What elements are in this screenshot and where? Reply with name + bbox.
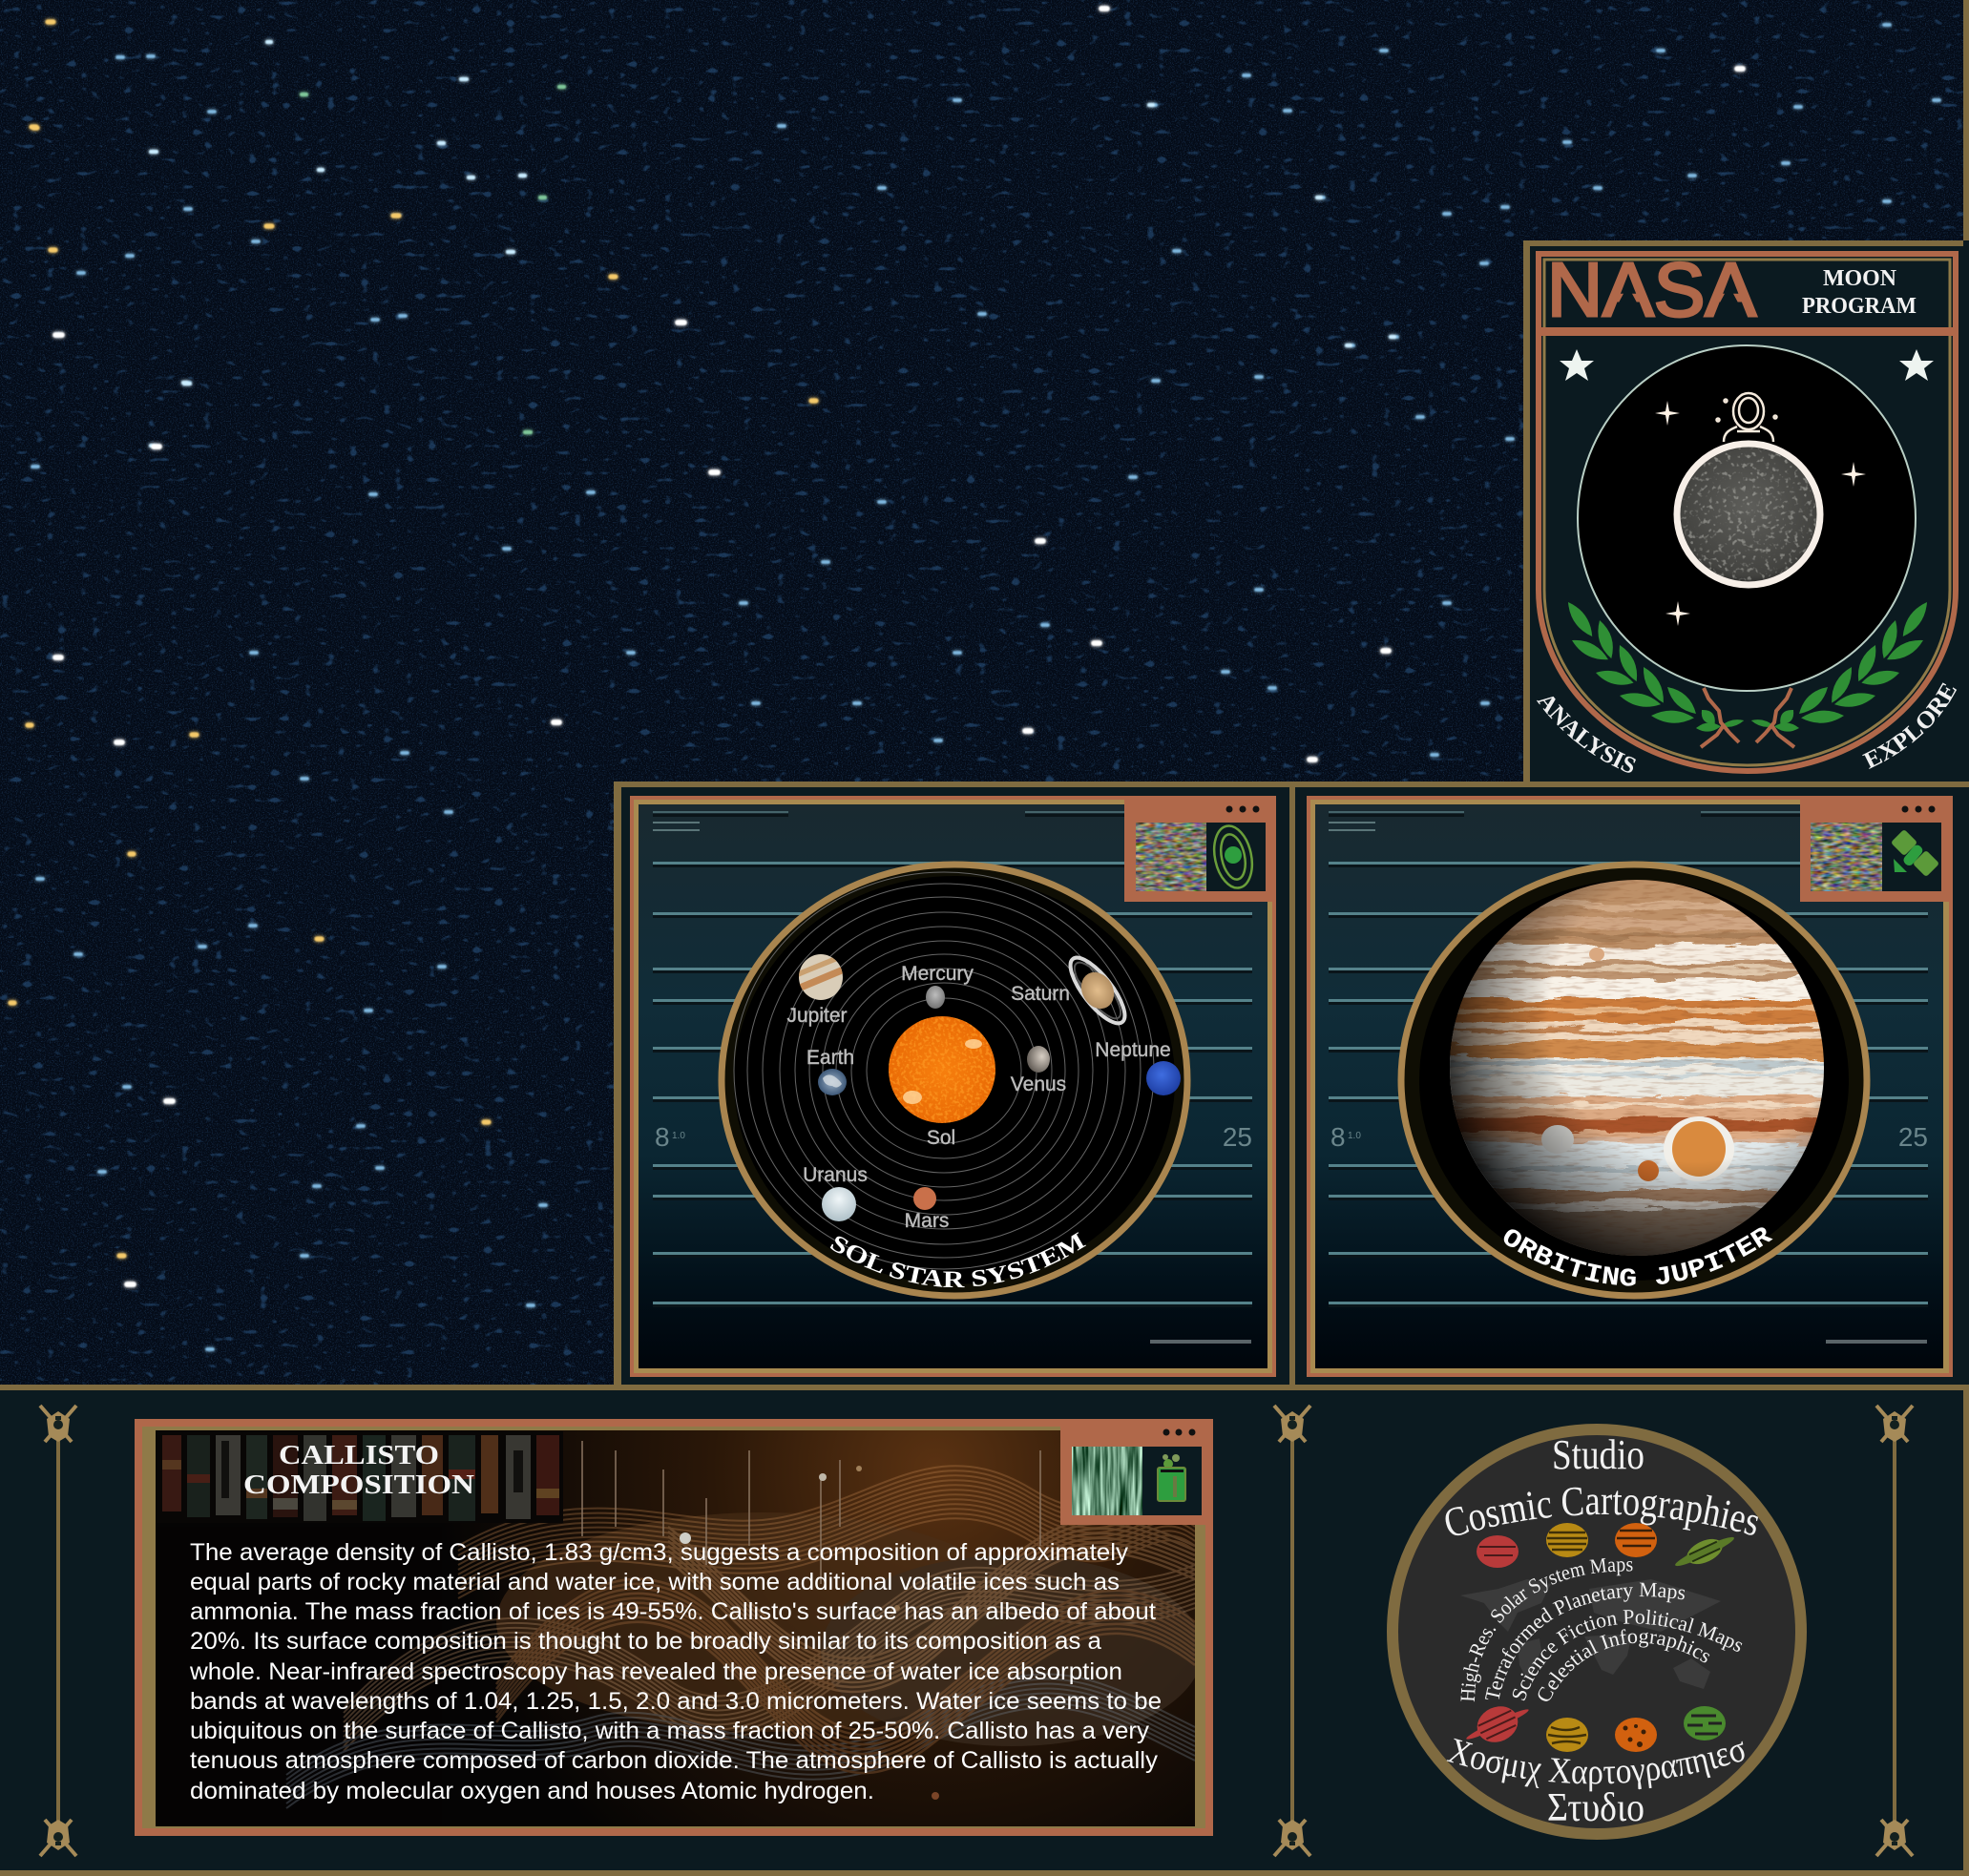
- bookshelf title backdrop: [155, 1431, 563, 1523]
- curved label explore: EXPLORE: [1862, 682, 1957, 769]
- scale labels: 25: [1223, 1122, 1252, 1152]
- planet labels: Uranus: [803, 1164, 868, 1186]
- planet labels: [786, 963, 1171, 1232]
- Callisto moon: [1677, 444, 1820, 585]
- scale labels: 8: [1330, 1122, 1346, 1152]
- planet: jupiter: [798, 954, 844, 1000]
- composition body text: 20%. Its surface composition is thought to be broadly similar to its composition as a: [190, 1628, 1101, 1655]
- decorative scan lines: [653, 811, 1252, 1344]
- planet labels: Sol: [927, 1127, 955, 1149]
- cosmic cartographies curved heading: Cosmic Cartographies: [1445, 1487, 1758, 1536]
- panel: cosmic cartographies studio logo: [1393, 1429, 1801, 1834]
- noise thumbnail: [1136, 823, 1206, 891]
- moon program label: [1802, 266, 1917, 319]
- scale labels: [655, 1122, 1252, 1152]
- planet: saturn: [1061, 950, 1134, 1031]
- great red spot: [1664, 1116, 1734, 1181]
- greek curved heading: Χοσμιχ Χαρτογραπηιεσ: [1444, 1729, 1750, 1792]
- composition body text: The average density of Callisto, 1.83 g/cm3, suggests a composition of approximately: [190, 1539, 1129, 1566]
- green noise thumbnail: [1072, 1447, 1142, 1515]
- curved label analysis: ANALYSIS: [1537, 697, 1636, 773]
- world map silhouette: [1460, 1579, 1721, 1689]
- panel heading: CALLISTO: [279, 1441, 439, 1470]
- icon: orbit: [1209, 823, 1257, 891]
- scale labels: [1330, 1122, 1928, 1152]
- curved services list: Science Fiction Political Maps: [1506, 1604, 1748, 1704]
- curved services list: Terraformed Planetary Maps: [1485, 1582, 1685, 1700]
- planet labels: Saturn: [1011, 983, 1070, 1005]
- studio heading: Studio: [1552, 1431, 1644, 1478]
- white stars: [1560, 349, 1934, 381]
- noise thumbnail: [1811, 823, 1882, 891]
- badge header divider: [1539, 327, 1956, 336]
- tab with orbit icon: [1124, 796, 1276, 902]
- planet: jupiter: [1450, 880, 1824, 1256]
- curved title: sol star system: SOL STAR SYSTEM: [830, 1232, 1086, 1288]
- composition body text: equal parts of rocky material and water ice, with some additional volatile ices such as: [190, 1569, 1120, 1595]
- panel frame background: [614, 782, 1969, 1392]
- decorative scan lines: [1329, 811, 1928, 1344]
- planet: mars: [913, 1187, 936, 1210]
- planet: venus: [1027, 1046, 1050, 1073]
- planet: mercury: [926, 986, 945, 1009]
- panel body: [1309, 798, 1951, 1375]
- moon program label: MOON: [1823, 266, 1897, 291]
- planet labels: Mercury: [901, 963, 974, 985]
- composition body text: dominated by molecular oxygen and houses Atomic hydrogen.: [190, 1778, 874, 1804]
- icon: beaker: [1158, 1454, 1185, 1501]
- panel: orbiting jupiter: [1307, 796, 1953, 1377]
- planet labels: Venus: [1011, 1073, 1066, 1095]
- laurel wreath right: [1750, 598, 1932, 747]
- ornament column middle: [1274, 1406, 1310, 1856]
- panel body: [632, 798, 1274, 1375]
- scale labels: 25: [1898, 1122, 1928, 1152]
- laurel wreath left: [1563, 598, 1745, 747]
- planet labels: Neptune: [1095, 1039, 1171, 1061]
- right gold edge strip: [1963, 0, 1969, 1876]
- badge shield inner gold line: [1544, 260, 1950, 765]
- planet: uranus: [822, 1187, 856, 1221]
- planet labels: Earth: [806, 1047, 854, 1069]
- jupiter disc: [1397, 861, 1871, 1300]
- curved services list: [1456, 1552, 1748, 1706]
- orbit rings: [734, 872, 1154, 1269]
- planet icons top row: [1477, 1523, 1738, 1574]
- white storm: [1541, 1125, 1574, 1154]
- curved services list: Celestial Infographics: [1531, 1624, 1716, 1706]
- icon: satellite: [1891, 829, 1939, 877]
- curved title: orbiting jupiter: ORBITING JUPITER: [1504, 1227, 1773, 1286]
- planet: earth: [818, 1069, 847, 1095]
- planet labels: Mars: [905, 1210, 949, 1232]
- planet icons bottom row: [1459, 1694, 1726, 1755]
- ornament column right: [1876, 1406, 1913, 1856]
- solar system disc: [718, 861, 1191, 1300]
- astronaut icon: [1716, 393, 1777, 442]
- panel: callisto composition: [138, 1419, 1213, 1832]
- panel: NASA moon program badge: [1523, 240, 1969, 786]
- tab with beaker icon: [1060, 1419, 1213, 1525]
- planet shading: [1450, 880, 1821, 1256]
- badge shield outline: [1539, 254, 1956, 771]
- scale labels: 8: [655, 1122, 670, 1152]
- card background art: [155, 1430, 1203, 1826]
- composition body text: ammonia. The mass fraction of ices is 49-55%. Callisto's surface has an albedo of about: [190, 1598, 1156, 1625]
- sun: [889, 1016, 995, 1123]
- panel: sol star system: [630, 796, 1276, 1377]
- scale labels: 1.0: [1348, 1131, 1361, 1141]
- composition body text: [189, 1539, 1162, 1804]
- curved services list: High-Res. Solar System Maps: [1460, 1557, 1632, 1702]
- composition body text: tenuous atmosphere composed of carbon dioxide. The atmosphere of Callisto is actually: [190, 1747, 1159, 1774]
- composition body text: ubiquitous on the surface of Callisto, with a mass fraction of 25-50%. Callisto has a very: [190, 1718, 1150, 1744]
- panel heading: COMPOSITION: [243, 1470, 474, 1500]
- moon program label: PROGRAM: [1802, 294, 1917, 319]
- NASA logotype: NASA: [1547, 247, 1757, 332]
- ornament column left: [40, 1406, 76, 1856]
- scale labels: 1.0: [672, 1131, 685, 1141]
- composition body text: bands at wavelengths of 1.04, 1.25, 1.5, 2.0 and 3.0 micrometers. Water ice seems to be: [190, 1688, 1162, 1715]
- greek studio heading: Στυδιο: [1547, 1786, 1644, 1830]
- bottom band: [0, 1385, 1969, 1876]
- black space disc: [1578, 345, 1916, 691]
- panel heading: [243, 1441, 474, 1500]
- planet labels: Jupiter: [786, 1005, 848, 1027]
- planet: neptune: [1146, 1061, 1181, 1095]
- composition body text: whole. Near-infrared spectroscopy has revealed the presence of water ice absorption: [189, 1658, 1122, 1685]
- sparkles: [1655, 401, 1866, 626]
- small red spot: [1638, 1160, 1659, 1181]
- tab with satellite icon: [1800, 796, 1953, 902]
